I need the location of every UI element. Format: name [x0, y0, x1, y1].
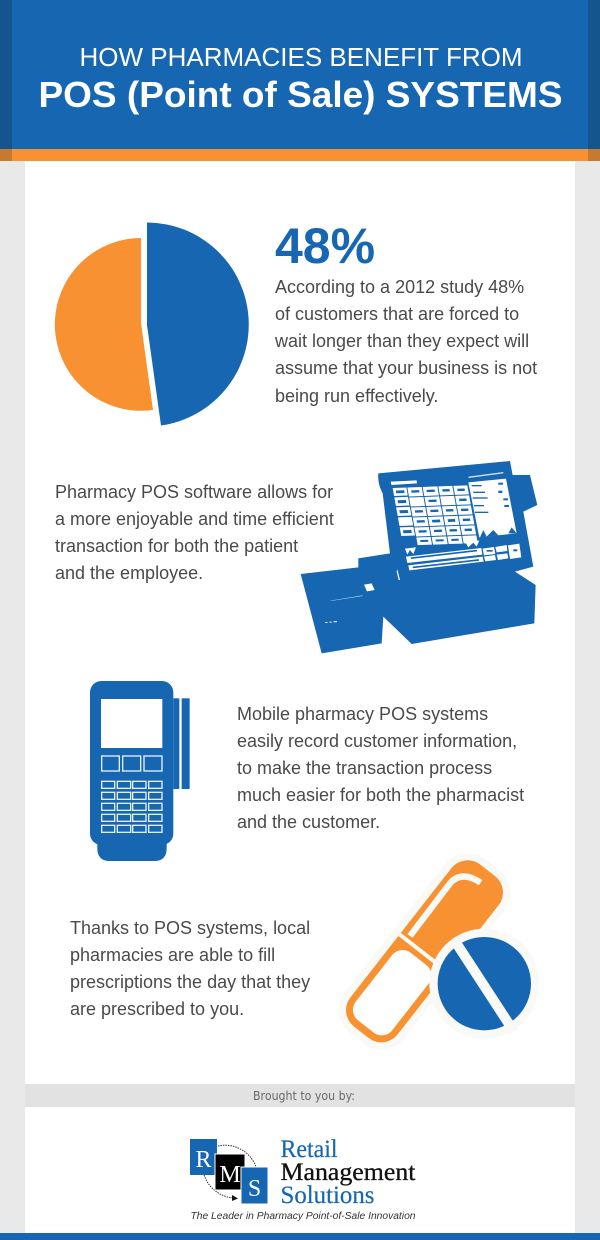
logo: Retail Management Solutions: Solutions — [280, 1182, 374, 1209]
text block: same-day prescriptions: pharmacies are able to fill — [70, 945, 275, 965]
text block: mobile POS: and the customer. — [237, 812, 380, 832]
text block: mobile POS: easily record customer information, — [237, 731, 517, 751]
logo: Retail Management Solutions: Retail — [280, 1136, 338, 1163]
logo: Retail Management Solutions: M — [219, 1162, 241, 1188]
sponsor band: Brought to you by: — [253, 1088, 355, 1103]
text block: mobile POS — [237, 704, 524, 832]
text block: same-day prescriptions: are prescribed to you. — [70, 999, 244, 1019]
text block: mobile POS: to make the transaction process — [237, 758, 492, 778]
text block: POS software: Pharmacy POS software allows for — [55, 482, 333, 502]
text block: 48% explanation: being run effectively. — [275, 386, 438, 406]
logo: Retail Management Solutions — [190, 1136, 416, 1222]
footer bar — [0, 1233, 600, 1240]
text block: POS software: a more enjoyable and time efficient — [55, 509, 334, 529]
text block: 48% explanation: According to a 2012 study 48% — [275, 277, 524, 297]
text block: 48% explanation — [274, 277, 537, 406]
title: POS (Point of Sale) SYSTEMS — [38, 74, 562, 115]
text block: same-day prescriptions — [70, 918, 310, 1019]
text block: 48% explanation: wait longer than they expect will — [274, 331, 529, 351]
text block: same-day prescriptions: Thanks to POS systems, local — [70, 918, 310, 938]
text block: 48% explanation: assume that your business is not — [275, 358, 537, 378]
title: HOW PHARMACIES BENEFIT FROM — [80, 44, 522, 72]
title — [38, 44, 562, 115]
statistic: 48%: 48% — [275, 218, 375, 274]
text block: mobile POS: Mobile pharmacy POS systems — [237, 704, 488, 724]
text block: POS software: and the employee. — [55, 563, 203, 583]
icon: POS terminal — [301, 461, 537, 653]
text block: POS software: transaction for both the patient — [55, 536, 298, 556]
text block: mobile POS: much easier for both the pharmacist — [237, 785, 524, 805]
pie chart: 48% — [55, 222, 249, 426]
logo: Retail Management Solutions: Management — [280, 1159, 416, 1186]
text block: POS software — [55, 482, 334, 583]
logo: Retail Management Solutions: S — [248, 1176, 261, 1202]
logo: Retail Management Solutions: The Leader in Pharmacy Point-of-Sale Innovation — [190, 1211, 416, 1222]
icon: capsule and tablet — [327, 842, 539, 1061]
text block: 48% explanation: of customers that are forced to — [275, 304, 519, 324]
logo: Retail Management Solutions: R — [195, 1147, 212, 1173]
sponsor band — [25, 1084, 575, 1107]
header banner — [0, 0, 600, 161]
text block: same-day prescriptions: prescriptions the day that they — [70, 972, 310, 992]
icon: mobile POS device — [90, 681, 190, 861]
